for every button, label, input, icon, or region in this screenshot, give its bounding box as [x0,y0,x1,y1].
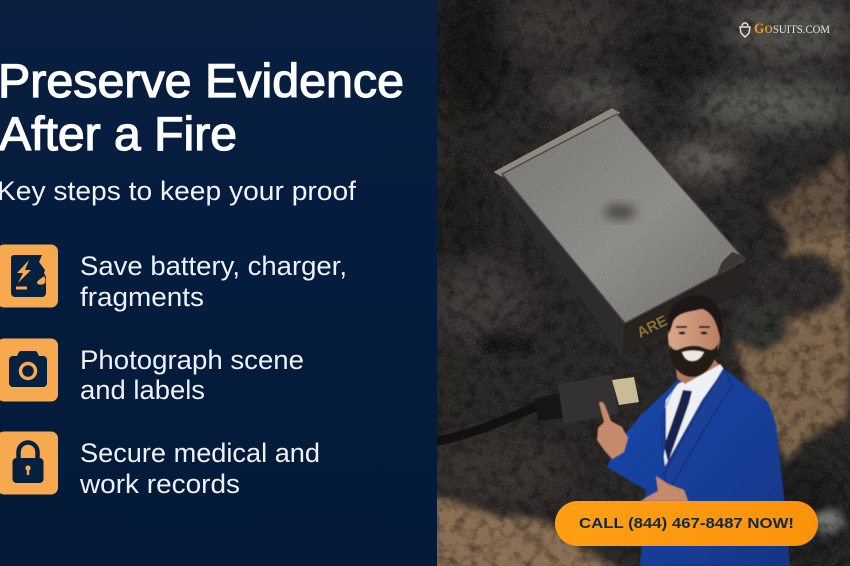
step 1: save battery [0,244,347,312]
step 3: secure records [0,432,320,499]
icon: camera [0,338,58,402]
step text: battery [80,251,347,312]
neck [676,359,719,384]
step text: records [79,438,320,499]
icon: padlock [0,432,58,494]
eyes and brows [676,326,710,334]
suit [607,366,790,566]
step text: records: work records [79,469,240,499]
panel: navy text panel [0,0,437,566]
photo: burnt battery pack [490,105,755,354]
subtitle: Key steps to keep your proof [0,176,357,206]
photo: USB charger cable [437,375,639,441]
title: Preserve Evidence [0,54,404,107]
lower hand [640,476,688,501]
hair [668,295,723,342]
step 2: photograph [0,338,304,405]
photo: burnt battery pack: ARE [634,312,670,342]
step text: photograph [80,345,304,405]
step text: photograph: Photograph scene [80,345,304,375]
step text: photograph: and labels [80,375,205,405]
title: After a Fire [0,107,237,160]
photo: charred wood plank [430,150,850,566]
head [667,308,721,351]
button: call to action: CALL (844) 467-8487 NOW! [579,515,794,532]
button: call to action [555,501,818,546]
photo: burnt debris background [430,0,850,566]
step text: records: Secure medical and [80,438,320,468]
pointing hand [597,402,628,459]
shirt and tie [662,364,724,466]
title [0,54,404,160]
step text: battery: fragments [80,282,204,312]
person: attorney in blue suit [597,295,790,566]
beard and smile [670,343,718,377]
icon: damaged battery [0,244,58,308]
step text: battery: Save battery, charger, [80,251,347,281]
logo: GoSuits.com: GOSUITS.COM [754,21,830,37]
